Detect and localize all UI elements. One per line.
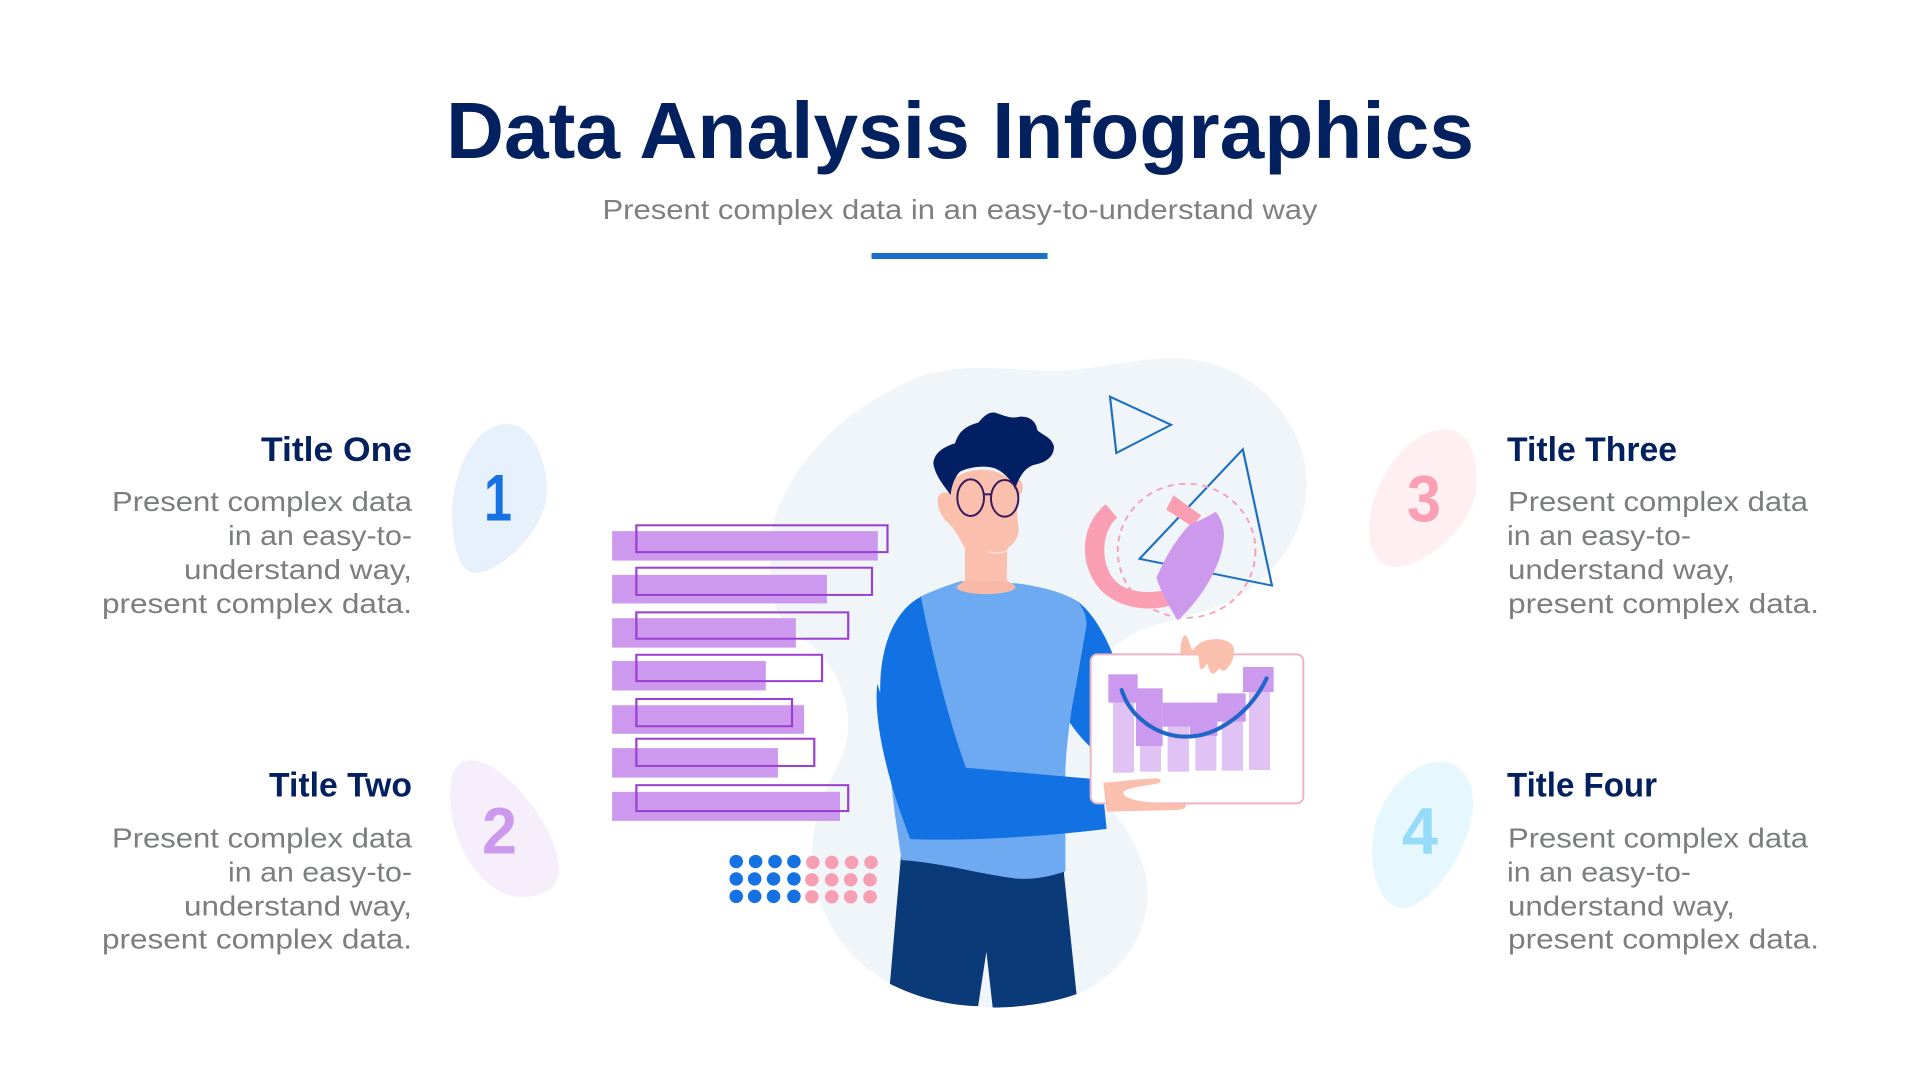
panel: title four — [1372, 762, 1819, 954]
abstract pie and triangle — [1085, 449, 1272, 620]
body text: title three — [1507, 486, 1819, 619]
smile — [988, 551, 1007, 553]
chart card — [1091, 635, 1303, 812]
body text: title one: present complex data. — [102, 588, 412, 619]
number badge 1: 1 — [484, 460, 512, 534]
right sleeve — [1069, 601, 1114, 749]
glasses — [957, 479, 1018, 517]
person head — [933, 413, 1054, 594]
heading: title one: Title One — [261, 431, 412, 469]
title underline — [872, 253, 1048, 259]
body text: title one: understand way, — [184, 554, 412, 585]
heading: title four: Title Four — [1507, 766, 1657, 804]
pants — [890, 849, 1077, 1008]
sweater torso — [881, 581, 1086, 879]
body text: title three: in an easy-to- — [1507, 520, 1691, 551]
number badge 4: 4 — [1402, 794, 1438, 868]
body text: title one: Present complex data — [112, 486, 412, 517]
panel: title three — [1369, 429, 1819, 619]
dark chart bars — [1108, 667, 1274, 746]
number badge 4 — [1372, 762, 1473, 908]
horizontal bar chart — [612, 525, 887, 821]
sleeve — [877, 597, 1107, 840]
body text: title two: Present complex data — [112, 822, 412, 854]
title: Data Analysis Infographics — [446, 86, 1474, 175]
small triangle outline — [1110, 397, 1171, 453]
number badge 2 — [450, 760, 559, 897]
background blob — [770, 358, 1307, 1008]
light chart bars — [1113, 692, 1270, 773]
panel: title two — [102, 760, 559, 954]
ear — [1016, 480, 1023, 495]
body text: title four — [1507, 822, 1819, 954]
panel: title one — [102, 424, 547, 619]
body text: title two — [102, 822, 412, 954]
number badge 3: 3 — [1407, 462, 1441, 536]
neck and face — [938, 470, 1019, 594]
collar — [957, 581, 1015, 594]
number badge 1 — [452, 424, 547, 573]
body text: title two: present complex data. — [102, 924, 412, 954]
subtitle: Present complex data in an easy-to-understand way — [602, 194, 1318, 225]
body text: title four: Present complex data — [1508, 822, 1808, 854]
body text: title four: understand way, — [1508, 890, 1735, 922]
body text: title one: in an easy-to- — [228, 520, 412, 551]
heading: title two: Title Two — [269, 766, 412, 804]
dot grid — [729, 855, 878, 903]
trend curve — [1122, 678, 1267, 737]
person body — [877, 581, 1114, 1008]
body text: title two: understand way, — [184, 890, 412, 922]
body text: title four: in an easy-to- — [1507, 856, 1691, 888]
body text: title three: Present complex data — [1508, 486, 1808, 517]
heading: title three: Title Three — [1507, 431, 1677, 469]
hand holding card bottom — [1103, 778, 1186, 812]
body text: title four: present complex data. — [1508, 924, 1819, 954]
body text: title two: in an easy-to- — [228, 856, 412, 888]
number badge 3 — [1369, 429, 1477, 567]
number badge 2: 2 — [482, 794, 517, 868]
hand holding card top — [1181, 635, 1234, 674]
body text: title three: understand way, — [1508, 554, 1735, 585]
hair — [933, 413, 1054, 495]
body text: title one — [102, 486, 412, 619]
illustration: analyst with charts — [612, 358, 1307, 1008]
body text: title three: present complex data. — [1508, 588, 1819, 619]
